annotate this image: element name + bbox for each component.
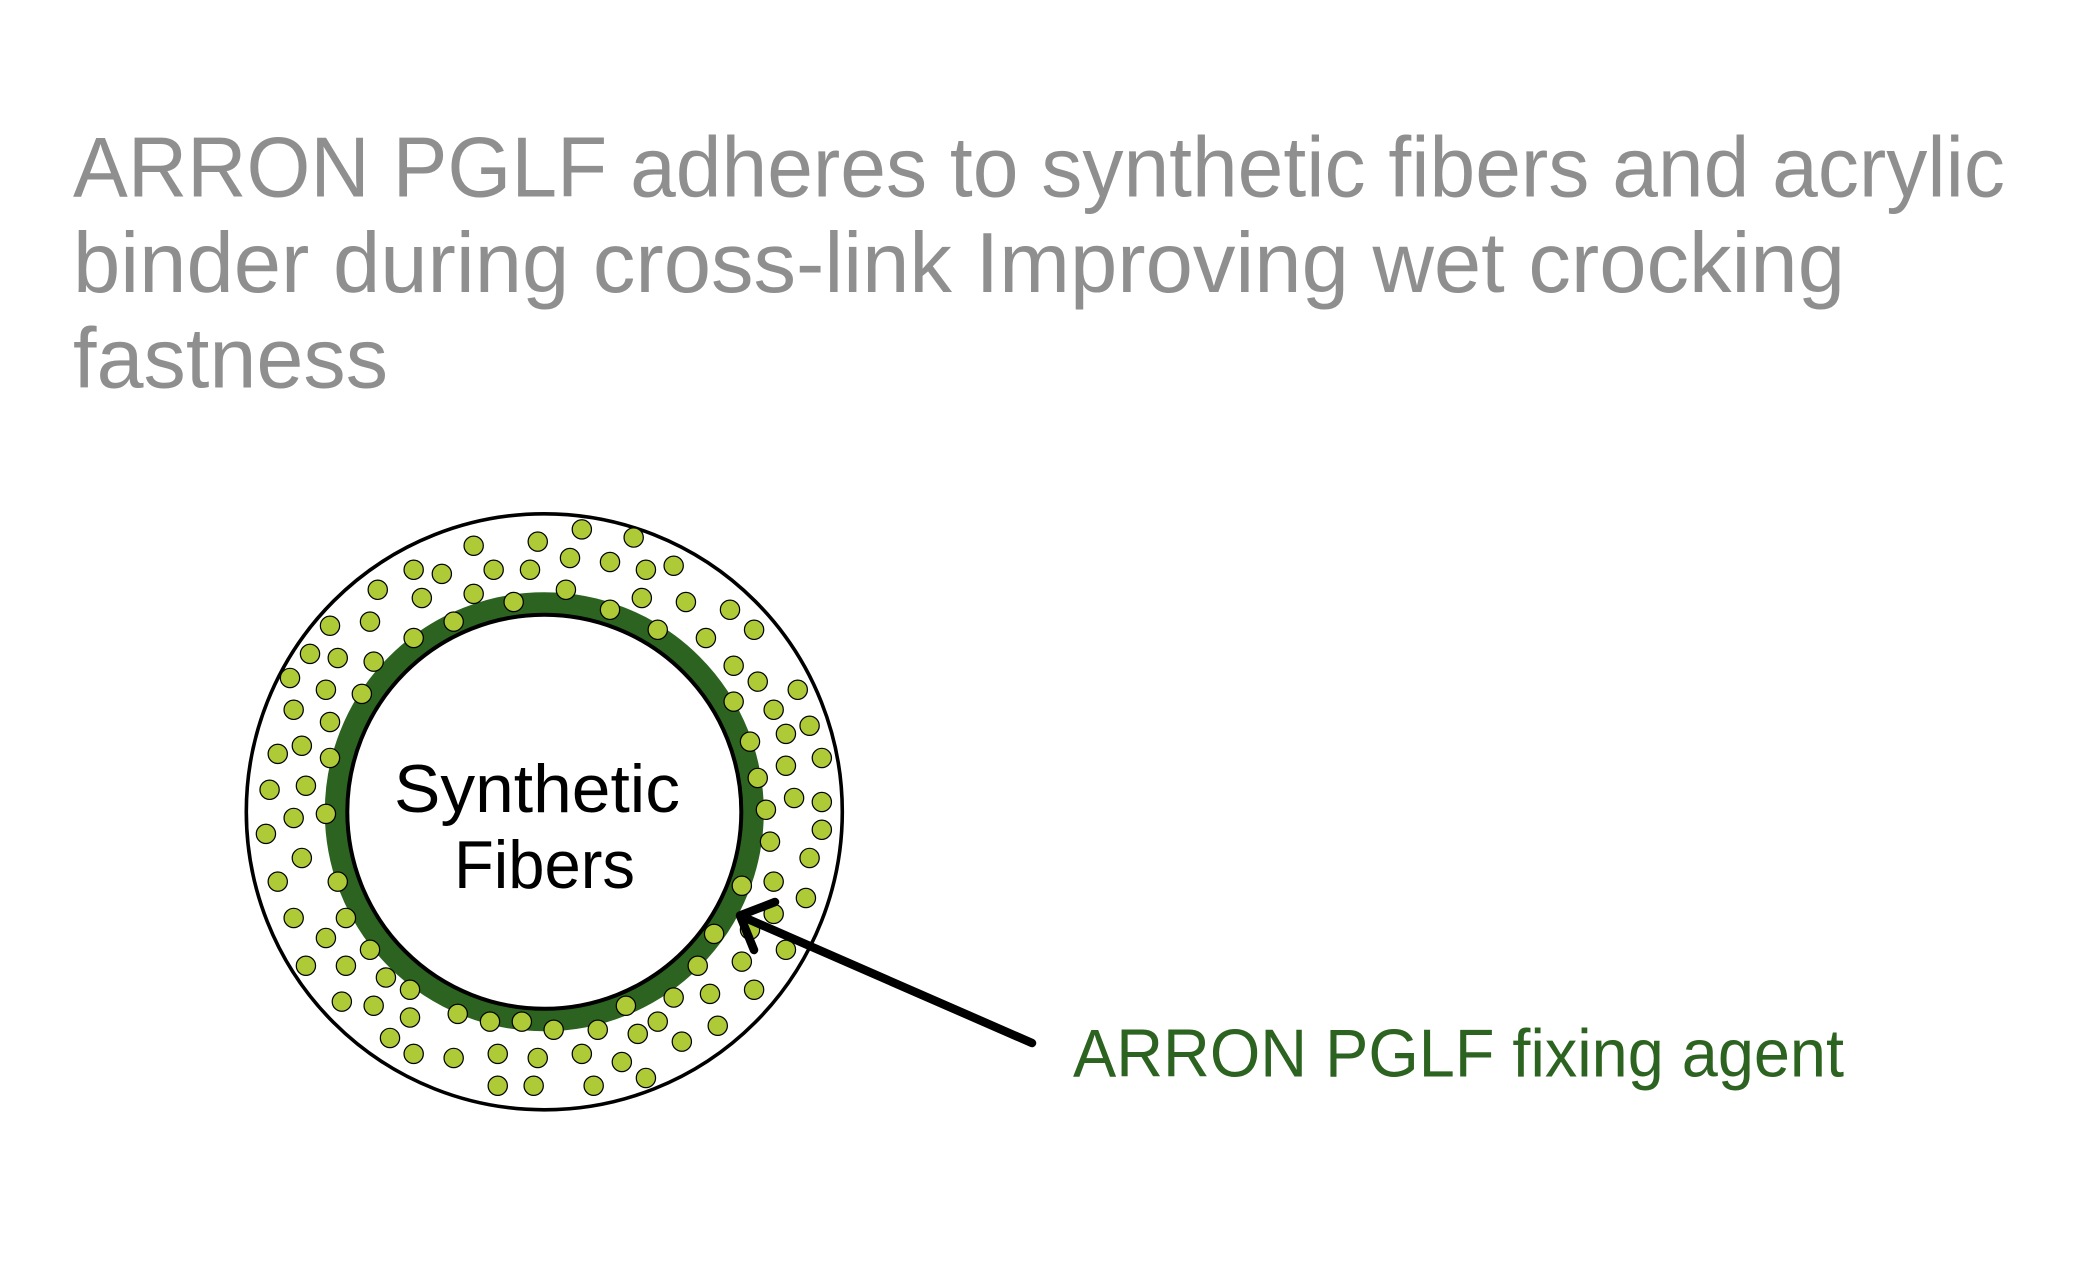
callout label: ARRON PGLF fixing agent [1073, 1016, 1844, 1092]
diagram: fiber cross-section [246, 514, 842, 1110]
heading: fastness [73, 312, 388, 406]
arrow [740, 902, 1032, 1043]
core label [394, 751, 680, 903]
outer coating circle [246, 514, 842, 1110]
core label: Synthetic [394, 751, 680, 827]
fixing agent ring [336, 604, 752, 1020]
core label: Fibers [454, 827, 635, 903]
synthetic fiber core [347, 615, 741, 1009]
heading: binder during cross-link Improving wet crocking [73, 216, 1845, 311]
heading: ARRON PGLF adheres to synthetic fibers and acrylic [73, 120, 2005, 216]
heading [73, 120, 2005, 406]
fixing agent particles [256, 520, 831, 1095]
